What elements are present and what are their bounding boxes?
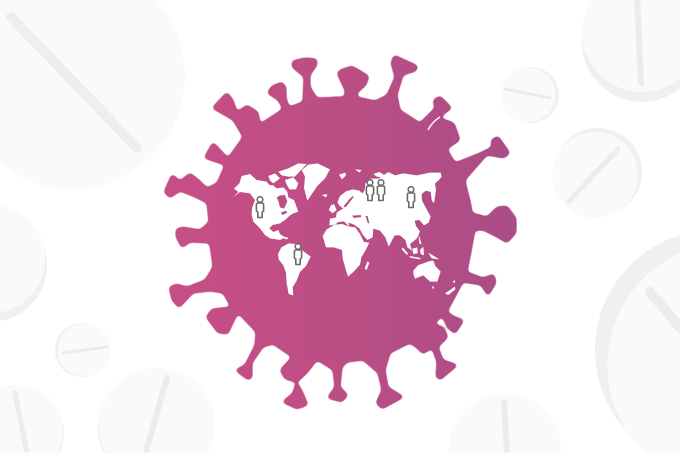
Arctic islands: [268, 163, 307, 189]
Great Lakes: [281, 211, 287, 215]
southern continents: [278, 224, 369, 295]
person: South America: [294, 244, 302, 264]
South America: [278, 243, 311, 295]
Tasmania and New Zealand: [432, 280, 455, 295]
world map: [233, 163, 455, 295]
Africa: [323, 224, 369, 277]
Caspian Sea: [366, 216, 369, 223]
Iceland: [322, 194, 337, 213]
Southeast Asian islands: [402, 233, 439, 259]
Iceland and Arctic islands: [339, 169, 386, 179]
person: Europe left: [366, 180, 374, 200]
Americas north: [233, 163, 337, 240]
pill: small lower left: [55, 323, 110, 377]
pill: medium right: [552, 128, 642, 218]
pill: top left large: [0, 0, 185, 189]
person: Asia: [407, 187, 415, 208]
Australia: [413, 261, 441, 282]
pill: bottom centre right: [449, 394, 561, 453]
Baltic Sea: [343, 196, 354, 207]
Black Sea: [352, 215, 361, 218]
pill: top right: [582, 0, 680, 102]
Cuba: [277, 235, 289, 239]
pill: large lower right: [595, 230, 680, 453]
Hudson Bay: [277, 195, 287, 209]
Greenland: [302, 163, 330, 201]
person: Europe right: [377, 180, 385, 200]
pill: bottom left: [0, 385, 64, 453]
person icons: [256, 180, 415, 264]
virus body with spikes: [164, 55, 517, 410]
Oceania: [402, 233, 455, 295]
person: North America: [256, 197, 264, 218]
Eurasia: [329, 172, 442, 251]
pill: small upper right: [500, 67, 559, 123]
Madagascar: [365, 261, 369, 270]
pill: bottom centre left: [98, 368, 215, 453]
Britain: [329, 204, 335, 213]
Eurasia group: [329, 169, 442, 251]
pill: left edge: [0, 205, 47, 322]
North America: [233, 174, 298, 240]
